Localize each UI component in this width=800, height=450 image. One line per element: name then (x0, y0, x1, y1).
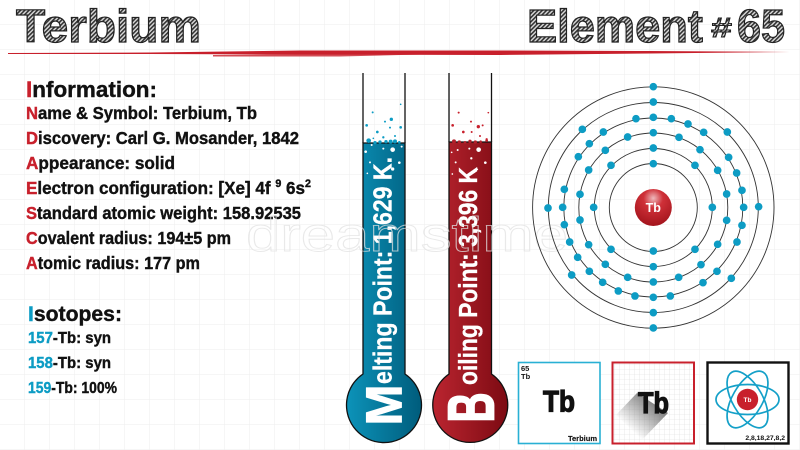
heading: Element #65 (527, 0, 785, 52)
text: name and symbol: Name & Symbol: Terbium, Tb (26, 103, 257, 123)
thermometer: melting point (346, 73, 422, 443)
card: periodic table tile: Terbium (568, 434, 597, 443)
thermometer: boiling point (433, 73, 508, 442)
text: discovery: Discovery: Carl G. Mosander, 1842 (26, 128, 299, 148)
text: atomic radius: Atomic radius: 177 pm (26, 253, 200, 273)
card: periodic table tile: Tb (543, 386, 575, 418)
card: periodic table tile: Tb (521, 372, 531, 381)
chart: Bohr atom diagram (533, 83, 774, 332)
panel: isotopes (28, 303, 122, 397)
label: big B: B (434, 392, 508, 422)
panel: information (26, 77, 311, 273)
label: boiling point value: oiling Point: 3,396 K (455, 166, 483, 385)
watermark: dreamstime (246, 209, 568, 262)
red brush underline (8, 50, 790, 56)
nucleus: Tb (646, 201, 661, 215)
label: big M: M (356, 384, 412, 426)
text: isotope 157: 157-Tb: syn (28, 330, 111, 347)
title: Terbium: Terbium (16, 0, 201, 52)
heading: Element #65: # (711, 12, 733, 43)
text: isotope 158: 158-Tb: syn (28, 355, 111, 372)
heading: Isotopes: Isotopes: (28, 303, 122, 326)
card: periodic table tile: 65 (521, 364, 529, 373)
heading: Element #65: 65 (737, 0, 785, 52)
text: appearance: Appearance: solid (26, 153, 175, 173)
card: long-shadow tile (612, 362, 694, 444)
heading: Element #65: Element (527, 0, 703, 52)
card: periodic table tile (518, 362, 600, 444)
label: melting point value: elting Point: 1,629 K. (370, 157, 398, 384)
heading: Information: Information: (26, 77, 157, 102)
text: electron configuration: 9 (275, 178, 281, 190)
card: long-shadow tile: Tb (638, 387, 669, 420)
card: atom icon tile: Tb (744, 397, 751, 404)
nucleus (635, 189, 672, 226)
text: standard atomic weight: Standard atomic weight: 158.92535 (26, 203, 301, 223)
text: electron configuration: 2 (305, 178, 311, 190)
card: atom icon tile (708, 362, 788, 444)
text: covalent radius: Covalent radius: 194±5 pm (26, 228, 231, 248)
text: electron configuration: 6s (281, 178, 305, 198)
text: isotope 159: 159-Tb: 100% (28, 380, 117, 397)
card: atom icon tile: 2,8,18,27,8,2 (745, 435, 785, 442)
text: electron configuration: Electron configuration: [Xe] 4f (26, 178, 277, 198)
